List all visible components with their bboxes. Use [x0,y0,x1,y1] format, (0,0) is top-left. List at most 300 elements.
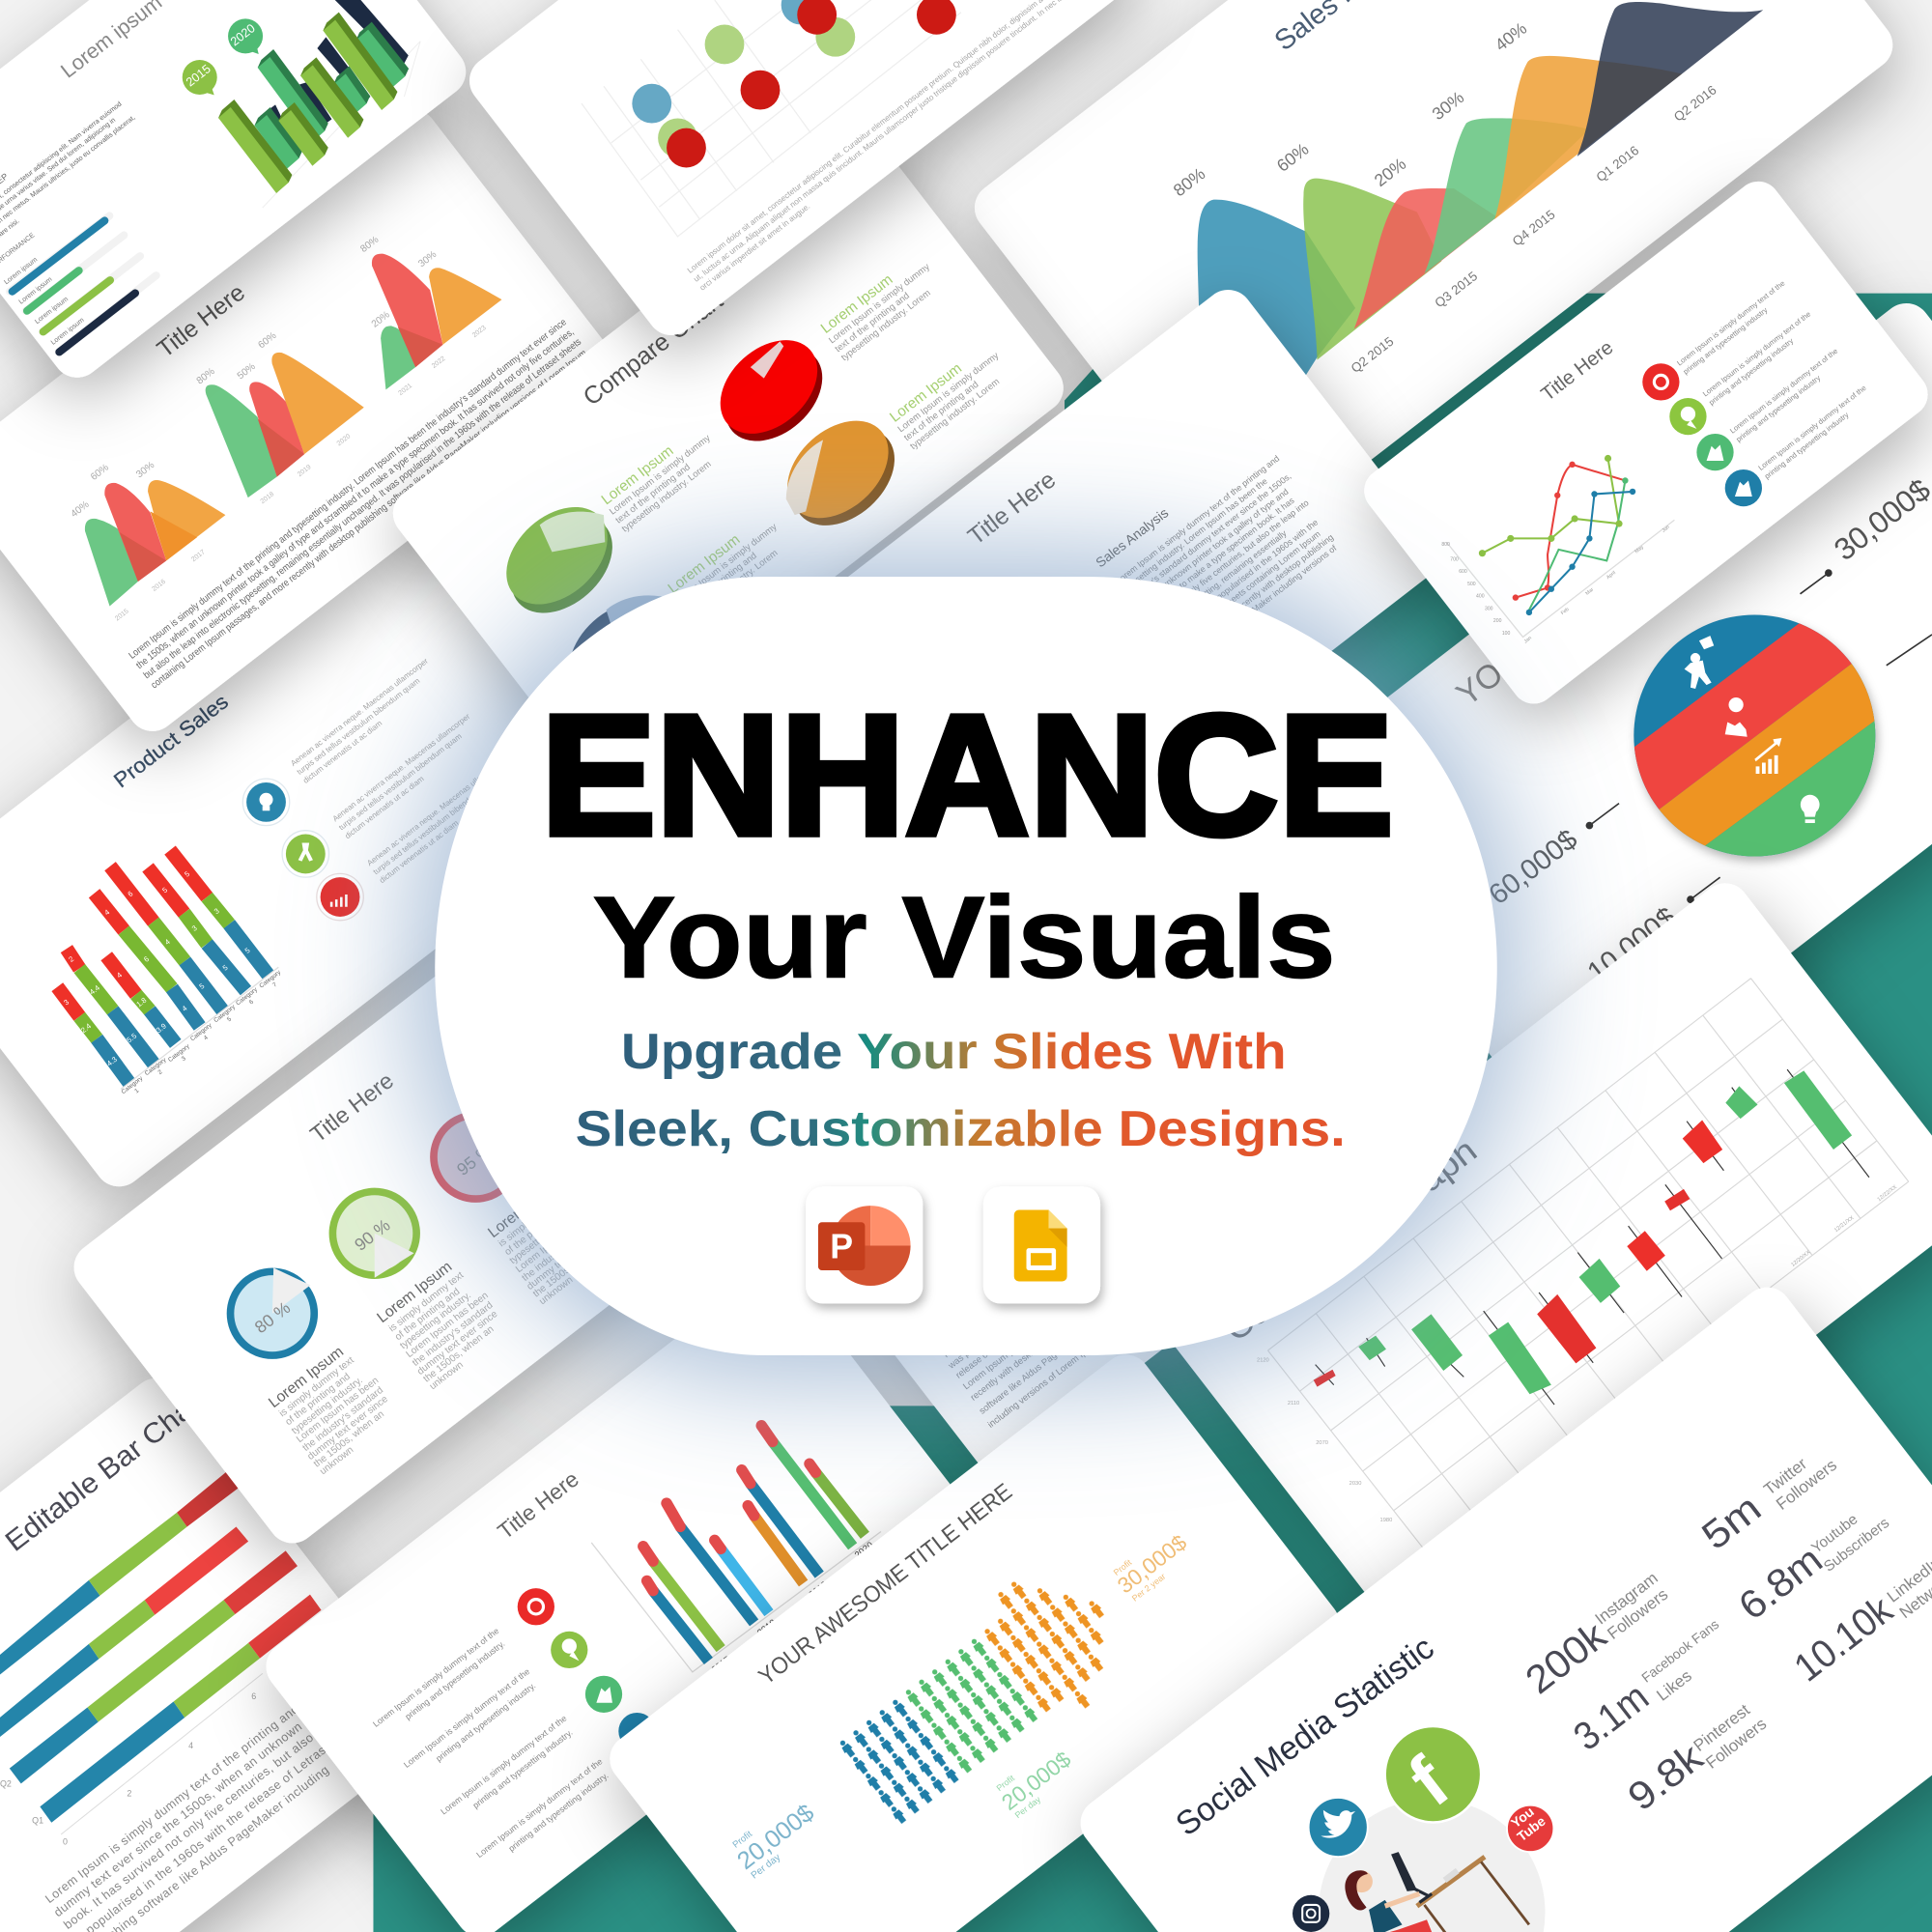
descriptions: Lorem Ipsum has been [405,1291,491,1360]
panel: awesome title people chart [600,1345,1350,1932]
descriptions: printing and typesetting industry. [506,1771,611,1854]
icons [242,779,363,921]
bar values: 2.4 [79,1021,94,1035]
bar values: 4.4 [88,983,102,997]
performance bars [10,215,156,352]
descriptions: of the printing and [284,1372,353,1428]
candlestick bodies [1314,1070,1852,1394]
year labels: 2018 [755,1618,779,1638]
icon: google slides [983,1186,1100,1303]
pie captions [599,262,1002,623]
percent and year labels: 50% [236,361,258,382]
axis labels: Q2 [0,1778,12,1788]
statistics [1517,1486,1901,1819]
descriptions: Lorem Ipsum [485,1174,566,1241]
illustration circle [1319,1799,1545,1932]
pie captions: Lorem Ipsum is simply dummy [674,522,780,606]
percent and year labels: 2023 [471,325,488,339]
gauge: 80 percent [231,1267,314,1355]
category labels: Category [144,1057,167,1077]
statistic labels: Followers [1702,1714,1770,1773]
body text: survived not only five centuries, but also the leap into [1145,497,1311,629]
icon: powerpoint: P [830,1227,853,1265]
chart labels: 30% [1429,87,1467,124]
category labels: Category [213,1004,237,1024]
statistic labels: Followers [1604,1584,1671,1643]
body text: Lorem Ipsum is simply dummy text of the printing and typesetting industry. Lorem Ipsum has been the industry's standard dummy text ever since [128,317,569,662]
subtitle line one: Upgrade Your Slides With [621,1024,1287,1080]
bar values: 1.8 [134,996,148,1009]
descriptions: of the printing and [393,1287,462,1343]
percent and year labels: 2018 [260,491,275,505]
callout: green profit: 20,000$ [997,1747,1075,1815]
statistics: 200k [1517,1612,1615,1702]
pie captions: Lorem Ipsum is simply dummy [827,262,932,346]
year bubbles: 2020 [228,21,258,48]
panel: sales analysis [743,280,1449,938]
heading: Title Here [493,1466,583,1544]
panel: sales report chart [965,0,1902,560]
title: your visuals: Your Visuals [593,872,1336,1002]
statistic labels: Subscribers [1821,1515,1892,1576]
stacked bars [643,1426,865,1661]
area chart [1198,2,1763,394]
icons [1642,363,1762,506]
performance labels [0,231,86,347]
icon: light bulb [1801,795,1820,823]
body text: Lorem Ipsum passages, and more [961,1298,1078,1392]
descriptions: printing and typesetting industry. [434,1681,537,1764]
descriptions: printing and typesetting industry [1734,373,1822,443]
panel: compare chart [384,131,1073,770]
axis labels: 2 [127,1789,131,1799]
panel: percentage circles [64,873,792,1553]
heading: Title Here [305,1067,398,1148]
descriptions: is simply dummy text [277,1355,356,1419]
body text: orci varius imperdiet sit amet in augue. [698,202,811,293]
axis labels: Mar [1584,586,1595,597]
descriptions [266,1174,610,1477]
pie captions: Lorem Ipsum [599,442,677,508]
chart labels: Q1 2016 [1594,143,1641,185]
descriptions: Lorem Ipsum is simply dummy text of the [371,1626,500,1729]
chart labels: 40% [1492,18,1530,55]
body text: recently with desktop publishing [969,1316,1078,1404]
axis labels: Jun [1661,525,1671,534]
chart labels: 80% [1170,164,1208,200]
year bubbles [183,18,263,95]
descriptions: the industry's standard [300,1385,385,1454]
body text: the 1500s, when an unknown printer took a galley of type and scrambled it to make a type specimen book. It has survived not only five centuries, [134,327,576,671]
3d bar chart [218,0,420,208]
body text: but also the leap into electronic typesetting, remaining essentially unchanged. It was popularised in the 1960s with the release of Letraset sheets [142,337,583,681]
category labels: 6 [248,998,255,1006]
descriptions: unknown [428,1360,466,1392]
category labels: 4 [203,1034,210,1041]
bar values: 4 [181,1004,189,1013]
axis labels: 6 [251,1691,256,1701]
axis labels [1257,1184,1898,1523]
panel: product sales [0,507,629,1197]
bar values: 5 [221,963,230,973]
year labels: 2019 [808,1579,830,1601]
title: enhance: ENHANCE [541,680,1394,871]
pie captions: Lorem Ipsum is simply dummy [896,351,1001,435]
callout: green profit: Per day [1013,1794,1043,1820]
pie captions: typesetting industry. Lorem [687,548,780,623]
axis labels: 12/20/XX [1790,1250,1812,1268]
bar values: 5 [160,886,169,895]
year bubbles: 2015 [184,62,213,89]
axis labels: 300 [1485,606,1493,611]
icon: instagram [1293,1895,1329,1932]
gauge: 90 percent [332,1191,416,1278]
performance labels: Lorem ipsum [17,275,53,306]
chart grid [1267,979,1909,1551]
body text: unchanged. It was popularised in the 1960s with the [1157,517,1320,646]
category labels: Category [189,1022,213,1042]
central white panel [435,577,1497,1355]
descriptions: turpis sed tellus vestibulum bibendum quam [337,731,464,832]
chart labels: Q3 2015 [1432,269,1480,310]
axis labels: 400 [1476,594,1485,600]
category labels: 1 [133,1087,141,1094]
heading: Editable Bar Chart [0,1382,213,1558]
pie captions: text of the printing and [833,291,912,355]
performance labels: Lorem ipsum [34,296,70,326]
heading: Compare Chart [579,287,728,412]
mountain chart group three [372,254,501,389]
callout: orange profit: 30,000$ [1113,1529,1191,1598]
chart axes [591,1531,881,1672]
descriptions: the 1500s, when an [312,1409,386,1470]
panel: candlestick graph [1153,873,1932,1649]
icons [518,1588,656,1749]
icon: youtube: Tube [1514,1813,1548,1844]
pie captions: text of the printing and [680,551,759,614]
axis labels: 100 [1502,631,1511,637]
callout: green profit: Profit [995,1773,1017,1793]
descriptions: turpis sed tellus vestibulum bibendum quam [372,776,498,876]
icon: twitter [1309,1798,1368,1857]
icon: facebook [1385,1726,1481,1822]
descriptions: Lorem Ipsum is simply dummy text of the [1756,384,1868,472]
panel: striped icon circle [1631,614,1884,867]
descriptions: typesetting industry. [508,1206,582,1266]
gauge: 80 percent: 80 % [251,1297,294,1337]
descriptions [371,1626,611,1860]
category labels: 5 [226,1015,233,1023]
descriptions: printing and typesetting industry [1682,305,1769,376]
panel: text card [780,831,1479,1481]
panel: bubble chart [460,0,1142,345]
percent and year labels: 2022 [431,355,447,370]
category labels [120,969,287,1101]
panel: social media statistic [1070,1277,1932,1932]
bar values [62,869,252,1068]
descriptions: Lorem Ipsum is simply dummy text of the [1675,279,1786,367]
descriptions: of the printing and [503,1202,572,1258]
descriptions: dictum venenatis ut ac diam [378,818,461,885]
chart labels: Q2 2015 [1349,334,1396,376]
panel: your title revenue card [1279,294,1932,1136]
percent and year labels: 2019 [297,464,313,478]
statistic labels: Youtube [1808,1511,1861,1557]
year labels: 2020 [853,1540,875,1561]
teal backdrop [373,294,1932,1932]
axis labels: 600 [1459,569,1467,575]
axis labels: April [1605,570,1617,581]
statistic labels: Instagram [1591,1568,1662,1629]
pie captions: typesetting industry. Lorem [839,288,933,363]
bar values: 4.3 [105,1055,119,1068]
illustration: woman at desk [1345,1852,1529,1932]
bar values: 5 [243,946,252,955]
percent and year labels: 40% [70,499,91,520]
subheading: Sales Analysis [1093,505,1171,570]
gauge: 90 percent: 90 % [351,1215,394,1255]
body text: remaining essentially unchanged. It [942,1264,1063,1360]
axis labels: 800 [1441,542,1450,548]
descriptions: typesetting industry. [398,1291,473,1351]
axis labels: 2030 [1350,1481,1361,1487]
statistic labels: Likes [1653,1665,1695,1705]
callout: blue profit: 20,000$ [732,1800,819,1875]
descriptions: the industry's standard [411,1300,495,1369]
people arrow chart [821,1547,1148,1845]
percent and year labels: 2016 [151,579,167,593]
stacked horizontal bars [0,1472,322,1834]
descriptions: the 1500s, when an [531,1239,606,1299]
chart labels: 20% [1371,154,1409,190]
percent and year labels: 60% [257,330,278,351]
callout: orange profit: Per 2 year [1130,1572,1168,1604]
category labels: 3 [181,1055,187,1063]
percent and year labels: 60% [89,463,111,483]
axis labels: Feb [1560,607,1571,616]
heading: Title Here [963,467,1061,551]
body text: industry's standard dummy text ever since the 1500s, [1126,471,1293,603]
axis labels: 2110 [1288,1401,1299,1406]
category labels: Category [235,986,259,1007]
bubbles [632,0,956,167]
descriptions: Lorem Ipsum is simply dummy text of the [1728,347,1839,436]
gauge: 95 percent [434,1115,518,1199]
body text: release of Letraset sheets containing Lorem Ipsum [1163,528,1322,655]
descriptions: is simply dummy text [387,1270,466,1334]
descriptions: Aenean ac viverra neque. Maecenas ullamcorper [331,712,472,823]
axis labels: 1980 [1380,1518,1392,1523]
pie captions: typesetting industry. Lorem [908,377,1002,452]
year labels: 2017 [710,1655,732,1676]
panel: stacked rounded bars [256,1260,997,1932]
bar values: 6 [127,889,134,898]
chart labels: Q2 2016 [1671,82,1719,125]
category labels: Category [258,969,282,990]
statistic labels: Facebook Fans [1638,1616,1721,1686]
pie: orange [768,402,914,545]
percent and year labels: 2015 [114,608,130,622]
panel: mountain charts [0,99,627,741]
axis labels: Jan [1523,636,1533,644]
heading: Title Here [1538,337,1617,406]
body text: scrambled it to make a type specimen book. It has [1139,496,1296,620]
bar values: 4 [102,907,112,917]
heading: Candlestick Graph [1217,1130,1484,1350]
percent and year labels [70,235,488,622]
descriptions: dummy text ever since [306,1394,390,1463]
category labels: Category [120,1075,144,1095]
statistic labels: Twitter [1760,1454,1810,1499]
pie captions: Lorem Ipsum is simply dummy [608,433,713,518]
body text: including versions of Lorem Ipsum. [986,1335,1105,1431]
descriptions: printing and typesetting industry. [470,1727,575,1810]
chart grid [582,0,961,237]
callout: orange profit: Profit [1112,1557,1134,1577]
descriptions: Aenean ac viverra neque. Maecenas ullamcorper [289,656,430,768]
statistics: 5m [1693,1486,1769,1558]
statistic labels: Followers [1773,1455,1840,1514]
axis labels: May [1634,544,1645,554]
descriptions: Lorem Ipsum [266,1344,347,1411]
axis labels [0,1691,256,1846]
body text: when an unknown printer took a galley of type and [1132,487,1291,612]
descriptions: Lorem Ipsum is simply dummy text of the [474,1756,605,1860]
bar values: 3 [213,906,221,916]
pie: red [702,322,840,460]
descriptions: dictum venenatis ut ac diam [301,719,384,785]
line chart [1446,458,1674,637]
performance labels: Lorem ipsum [3,256,39,286]
performance labels: Lorem ipsum [49,316,86,347]
axis labels: 12/21/XX [1833,1215,1856,1234]
callout: blue profit: Per day [750,1852,783,1882]
bar values: 5 [183,869,191,879]
percent and year labels: 2017 [190,549,207,563]
bar values: 4 [163,937,172,947]
body text [942,1264,1105,1431]
mountain chart group two [206,353,364,497]
descriptions: the 1500s, when an [421,1324,496,1384]
descriptions: printing and typesetting industry. [403,1638,506,1721]
stacked column chart [57,850,278,1090]
axis labels [1441,525,1671,644]
subtitle line two: Sleek, Customizable Designs. [576,1101,1346,1157]
value callouts: 10,000$ [1581,901,1682,988]
chart labels: 60% [1273,139,1313,176]
icon: growth chart [1754,738,1781,774]
axis labels: 500 [1467,582,1476,587]
body text [1114,453,1339,671]
icon: powerpoint [806,1186,923,1303]
callout: blue profit: Profit [731,1829,754,1851]
blob blue halo [435,577,1497,1355]
panel: line chart card [1355,173,1932,713]
descriptions: typesetting industry. [290,1376,365,1436]
percent and year labels: 30% [134,460,156,480]
pie captions: Lorem Ipsum [665,531,743,597]
axis labels: Q1 [32,1816,43,1826]
category labels: Category [167,1043,191,1064]
chart labels [1170,18,1719,376]
pie captions: typesetting industry. Lorem [620,459,714,534]
body text: software like Aldus PageMaker [978,1331,1084,1417]
heading: Social Media Statistic [1169,1630,1440,1843]
value callouts [1483,471,1932,988]
descriptions: is simply dummy text [497,1185,576,1249]
statistics: 3.1m [1565,1674,1657,1759]
icon: youtube [1507,1804,1553,1852]
descriptions: the industry's standard [520,1215,605,1284]
heading: YOUR AWESOME TITLE HERE [754,1479,1017,1690]
icon: facebook: f [1394,1742,1464,1822]
bar values: 5 [197,981,206,991]
descriptions [1675,279,1868,481]
axis labels: 4 [188,1741,193,1750]
body text: release of Letraset sheets containing [953,1281,1079,1381]
percent and year labels: 2020 [336,433,352,447]
bar values: 4 [115,970,124,980]
descriptions: unknown [318,1445,355,1477]
panel: lorem ipsum 3d bars [0,0,475,387]
percent and year labels: 2021 [397,383,413,397]
axis labels: 0 [63,1836,68,1846]
heading: Product Sales [109,689,233,792]
body text: Lorem Ipsum is simply dummy text of the printing and [1114,453,1281,585]
percent and year labels: 80% [358,235,381,255]
axis labels: 2120 [1257,1357,1269,1363]
axis labels: 2070 [1316,1440,1328,1446]
gauge: 95 percent: 95 % [453,1140,497,1179]
body text: Lorem Ipsum is simply dummy text of the printing and typesetting industry [43,1628,396,1906]
category labels: 2 [156,1068,164,1076]
descriptions: Lorem Ipsum [374,1259,455,1326]
pie: green [488,488,631,633]
bar values: 5.5 [125,1032,138,1044]
bar values: 6 [142,954,151,964]
descriptions: Aenean ac viverra neque. Maecenas ullamcorper [365,756,506,867]
axis labels: 700 [1450,556,1459,562]
percent and year labels: 80% [195,366,217,386]
year labels [710,1540,875,1676]
descriptions: Lorem Ipsum has been [295,1376,381,1445]
statistics: 9.8k [1619,1734,1712,1819]
bar values: 2 [67,954,75,964]
descriptions [289,656,506,885]
body text: was popularised in the 1960s with the [946,1269,1074,1372]
panel: editable bar chart [0,1368,440,1932]
icon: gear and person [1725,697,1747,737]
descriptions: dummy text ever since [526,1224,610,1293]
pie captions: Lorem Ipsum [887,360,965,426]
body text: containing Lorem Ipsum passages, and more recently with desktop publishing software like Aldus PageMaker including versions of Lorem Ipsum. [150,347,591,691]
descriptions: Lorem Ipsum is simply dummy text of the [439,1714,569,1816]
line markers [1479,455,1635,615]
body text: dummy text ever since the 1500s, when an unknown printer took a galley [51,1644,401,1919]
icon: person carrying box [1685,636,1714,689]
pie captions: text of the printing and [902,380,980,443]
body text: typesetting industry. Lorem Ipsum has been the [1121,476,1269,594]
pie captions: text of the printing and [613,462,693,526]
category labels: 7 [271,981,279,989]
descriptions: dictum venenatis ut ac diam [343,774,426,840]
mountain chart group one [85,480,225,607]
heading: YOUR TITLE [1450,565,1627,713]
pie: navy [551,582,689,719]
bar values: 3 [190,923,199,933]
chart labels: Q4 2015 [1510,207,1558,248]
body text: book. It has survived not only five centuries, but also the leap into [61,1683,378,1932]
